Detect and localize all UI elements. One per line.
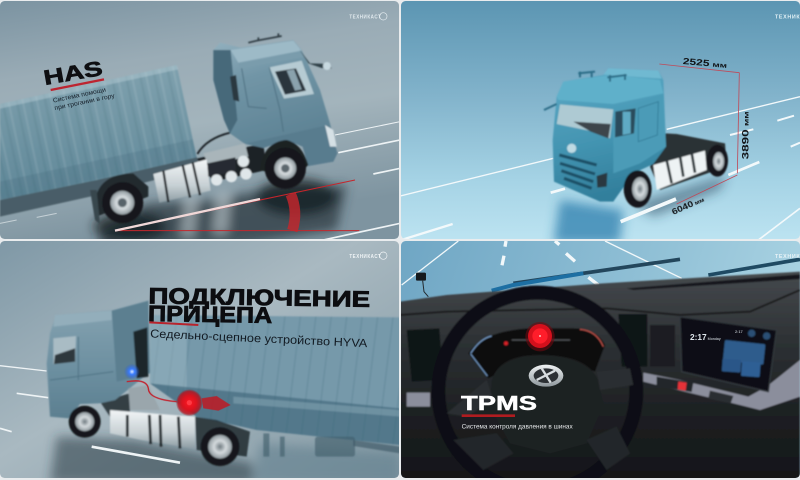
logo: Техникаст: ТЕХНИКАСТ: [349, 15, 381, 21]
icon: blue light: [124, 364, 140, 380]
icon: steering wheel badge: [529, 365, 563, 387]
cab: [213, 40, 337, 166]
logo: Техникаст: ТЕХНИКАСТ: [349, 254, 381, 260]
text: HAS description: при трогании в гору: [54, 92, 116, 112]
text: TPMS description: Система контроля давления в шинах: [462, 425, 573, 431]
steering wheel: [438, 293, 636, 480]
label: height: мм: [743, 111, 750, 126]
road markings: [400, 97, 800, 240]
heading: HAS: HAS: [42, 57, 104, 90]
label: height: 3890: [740, 129, 750, 159]
cab body: [553, 68, 666, 202]
label: width: 2525: [682, 56, 710, 68]
truck: tractor unit: [544, 68, 728, 208]
chassis under cab: [100, 393, 130, 417]
text: coupling description: Седельно-сцепное устройство HYVA: [150, 327, 368, 350]
dash top crease: [627, 274, 800, 290]
heading: trailer connection: ПРИЦЕПА: [148, 301, 272, 328]
front wheel: [69, 406, 101, 438]
screen: [680, 317, 777, 392]
container: [0, 65, 197, 200]
front wheel: [260, 140, 308, 189]
screen clock: 2:17: [735, 329, 744, 334]
label: width: мм: [712, 62, 727, 70]
chassis and tanks: [650, 133, 727, 190]
container: [150, 315, 400, 445]
dash upper contour: [400, 290, 800, 315]
road reflection: [93, 178, 347, 247]
trailer landing gear: [263, 433, 355, 457]
icon: red coupling highlight: [176, 389, 231, 416]
truck reflection: [553, 175, 727, 243]
screen clock: [690, 329, 744, 342]
label: height: [742, 112, 748, 160]
text: HAS description: [53, 88, 114, 111]
dashboard: [400, 272, 800, 480]
accent: HAS underline: [51, 79, 104, 90]
road markings: [0, 122, 400, 240]
screen clock: 2:17: [690, 332, 707, 342]
road reflection: [50, 437, 400, 480]
panel: trailer coupling: [0, 240, 400, 480]
cab: [47, 301, 150, 418]
rear wheel: [201, 427, 239, 466]
headlight: [597, 173, 607, 188]
checker plate: [128, 385, 160, 410]
icon: red TPMS warning: [525, 322, 555, 351]
label: length: [672, 198, 704, 214]
icon: red slope angle marker: [115, 180, 359, 231]
chassis and air tanks: [153, 143, 267, 203]
panel: HAS hill-start assist: [0, 0, 400, 247]
label: length: мм: [694, 197, 706, 207]
front wheel: [624, 170, 652, 208]
air hoses: [197, 133, 230, 154]
wipers: [492, 259, 800, 291]
mirror and rack: [544, 72, 627, 110]
road markings: [402, 241, 682, 285]
icon: antenna: [416, 273, 428, 297]
text: HAS description: Система помощи: [52, 86, 107, 105]
rear wheel: [707, 145, 728, 177]
fuel tanks: [110, 410, 195, 448]
roof rack: [248, 33, 282, 43]
rear wheel arch: [195, 417, 250, 457]
screen clock: Monday: [708, 337, 721, 341]
truck: tractor with container: [0, 33, 337, 224]
vents: [407, 314, 675, 382]
rear wheel: [90, 173, 148, 224]
label: width: [683, 58, 726, 68]
trailer lower rail: [353, 440, 400, 453]
lower dash light trim: [407, 360, 800, 410]
heading: trailer connection: [148, 283, 370, 329]
label: length: 6040: [670, 198, 695, 217]
heading: trailer connection: ПОДКЛЮЧЕНИЕ: [148, 283, 370, 312]
heading: TPMS: TPMS: [461, 392, 537, 415]
grille: [559, 155, 597, 188]
semi-trailer chassis: [0, 157, 200, 217]
dimension lines: [659, 64, 739, 204]
panel: TPMS cockpit: [400, 240, 800, 480]
road markings: [0, 366, 180, 463]
panel: dimensions: [400, 0, 800, 243]
truck: tractor with transparent trailer: [47, 301, 400, 466]
instrument cluster: [468, 328, 605, 378]
air line: [127, 381, 177, 402]
accent: heading underline: [149, 322, 198, 325]
buttons: [657, 377, 733, 403]
accent: TPMS underline: [462, 412, 515, 420]
badge: [567, 144, 576, 153]
